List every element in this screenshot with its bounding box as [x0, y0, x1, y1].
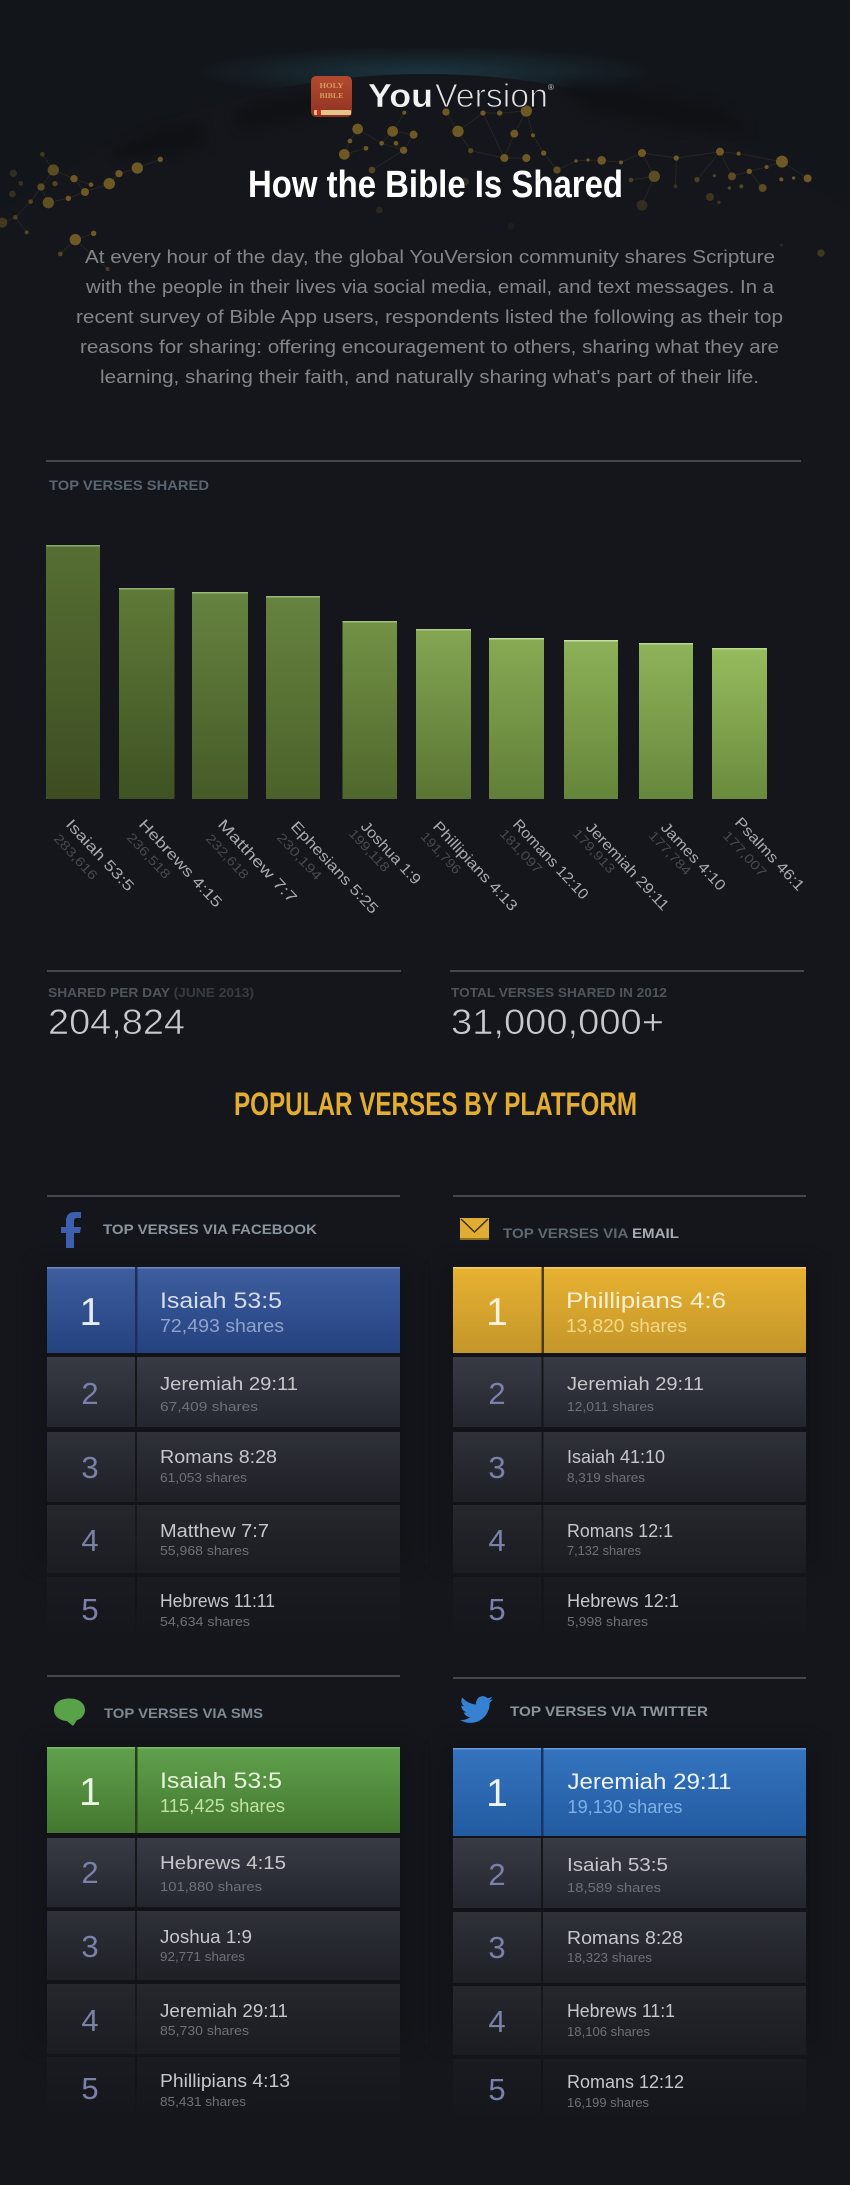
rank 1 row: 1 — [486, 1772, 508, 1815]
rank 5 row: Romans 12:12 — [567, 2072, 684, 2092]
icon: speech bubble — [54, 1698, 85, 1726]
icon: envelope — [460, 1218, 489, 1240]
rank 3 row: 18,323 shares — [567, 1950, 653, 1965]
icon: holy bible book: BIBLE — [320, 91, 344, 100]
rank 3 row: 61,053 shares — [160, 1470, 248, 1485]
rank 3 row — [47, 1911, 400, 1980]
rank 1 row: Phillipians 4:6 — [566, 1288, 726, 1313]
rank 3 row: Isaiah 41:10 — [567, 1447, 665, 1467]
rank 4 row: 18,106 shares — [567, 2024, 650, 2039]
bar labels: 283,616 — [51, 831, 101, 883]
rank 1 row: 13,820 shares — [566, 1316, 687, 1336]
rank 1 row: 1 — [79, 1771, 101, 1814]
bars — [46, 545, 767, 799]
rank 2 row: Hebrews 4:15 — [160, 1853, 286, 1873]
stat: total verses shared: TOTAL VERSES SHARED IN 2012 — [451, 985, 667, 1000]
rank 3 row: Romans 8:28 — [567, 1928, 683, 1948]
rank 2 row: 2 — [81, 1376, 99, 1411]
rank 5 row: Hebrews 11:11 — [160, 1591, 275, 1611]
rank 2 row — [453, 1357, 806, 1427]
bar labels: Ephesians 5:25 — [287, 818, 381, 917]
rank 5 row: 5 — [488, 1592, 506, 1627]
panel label: TOP VERSES VIA TWITTER — [510, 1703, 708, 1719]
rank 1 row: 19,130 shares — [568, 1797, 682, 1817]
bar labels: 230,194 — [274, 830, 325, 883]
rank 1 row: 1 — [80, 1291, 101, 1334]
rank 4 row: 4 — [488, 2004, 506, 2039]
wordmark — [368, 77, 554, 114]
rank 4 row: Matthew 7:7 — [160, 1521, 269, 1541]
rank 5 row — [47, 2057, 400, 2120]
intro text block: At every hour of the day, the global YouVersion community shares Scripture — [85, 247, 775, 267]
stat: shared per day: 204,824 — [48, 1003, 185, 1042]
rank 4 row: Romans 12:1 — [567, 1521, 673, 1541]
intro text block: recent survey of Bible App users, respondents listed the following as their top — [76, 307, 783, 327]
wordmark: Version — [435, 77, 548, 114]
rank 5 row: Hebrews 12:1 — [567, 1591, 679, 1611]
bar labels: Joshua 1:9 — [357, 818, 424, 888]
rank 4 row: 7,132 shares — [567, 1543, 641, 1558]
rank 4 row — [453, 1505, 806, 1573]
rank 2 row: 2 — [488, 1857, 506, 1892]
rank 1 row: 115,425 shares — [160, 1796, 285, 1816]
bar labels: 199,118 — [346, 826, 393, 875]
stat: shared per day: SHARED PER DAY (JUNE 2013) — [48, 985, 254, 1000]
icon: facebook f — [61, 1212, 81, 1248]
rank 2 row — [47, 1357, 400, 1427]
rank 2 row: 101,880 shares — [160, 1879, 263, 1894]
logo: YouVersion — [311, 76, 554, 117]
rank 4 row: Hebrews 11:1 — [567, 2001, 675, 2021]
rank 3 row: 3 — [488, 1450, 506, 1485]
rank 5 row: 5 — [81, 2071, 99, 2106]
rank 3 row — [453, 1432, 806, 1502]
bar labels — [51, 814, 808, 917]
intro text block: with the people in their lives via social media, email, and text messages. In a — [85, 277, 775, 297]
rank 3 row: 3 — [81, 1929, 99, 1964]
rank 5 row: 5 — [488, 2072, 506, 2107]
rank 5 row: 5,998 shares — [567, 1614, 649, 1629]
panel: facebook — [47, 1195, 400, 1640]
rank 3 row: 3 — [488, 1930, 506, 1965]
rank 1 row — [453, 1267, 806, 1353]
rank 4 row — [453, 1986, 806, 2055]
bar labels: Romans 12:10 — [509, 816, 592, 903]
rank 5 row — [453, 1577, 806, 1640]
rank 4 row — [47, 1505, 400, 1573]
rank 3 row: Joshua 1:9 — [160, 1927, 252, 1947]
rank 5 row — [47, 1577, 400, 1640]
stat: total verses shared: 31,000,000+ — [451, 1003, 664, 1042]
panel label: TOP VERSES VIA FACEBOOK — [103, 1221, 317, 1237]
panel label: TOP VERSES VIA SMS — [104, 1705, 263, 1721]
rank 4 row: 4 — [81, 2003, 99, 2038]
icon: twitter bird — [460, 1696, 493, 1723]
bar labels: Phillipians 4:13 — [429, 818, 521, 915]
bar labels: 181,097 — [497, 826, 545, 876]
rank 2 row: 18,589 shares — [567, 1880, 662, 1895]
bar labels: Hebrews 4:15 — [135, 816, 225, 911]
rank 2 row: 67,409 shares — [160, 1399, 259, 1414]
rank 1 row — [47, 1747, 400, 1833]
bar labels: Jeremiah 29:11 — [582, 819, 672, 914]
bar labels: Matthew 7:7 — [214, 816, 300, 907]
heading: top verses shared: TOP VERSES SHARED — [49, 477, 209, 493]
rank 1 row: Jeremiah 29:11 — [568, 1769, 732, 1794]
icon: holy bible book — [311, 76, 352, 117]
rank 4 row: 4 — [81, 1523, 99, 1558]
panel: twitter — [453, 1677, 806, 2122]
bar labels: 177,784 — [646, 828, 694, 878]
rank 3 row: Romans 8:28 — [160, 1447, 277, 1467]
rank 5 row: Phillipians 4:13 — [160, 2071, 290, 2091]
rank 1 row — [47, 1267, 400, 1353]
bar labels: 232,618 — [203, 831, 252, 882]
bar labels: 179,913 — [570, 826, 618, 876]
panel: sms — [47, 1675, 400, 2120]
rank 5 row: 85,431 shares — [160, 2094, 247, 2109]
wordmark: ® — [548, 83, 554, 92]
rank 2 row — [453, 1838, 806, 1908]
rank 1 row: 1 — [486, 1291, 508, 1334]
rank 3 row — [453, 1912, 806, 1983]
rank 2 row: 12,011 shares — [567, 1399, 655, 1414]
bar chart: top verses shared — [46, 545, 808, 917]
rank 1 row — [453, 1748, 806, 1836]
rank 1 row: Isaiah 53:5 — [160, 1768, 282, 1793]
intro text block — [76, 247, 783, 387]
panel: email — [453, 1195, 806, 1640]
rank 1 row: 72,493 shares — [160, 1316, 284, 1336]
stat: total verses shared — [450, 970, 804, 1042]
globe and network map backdrop — [0, 0, 850, 1166]
bar labels: 236,518 — [124, 830, 174, 882]
rank 4 row: 4 — [488, 1523, 506, 1558]
rank 5 row: 16,199 shares — [567, 2095, 649, 2110]
bar labels: 177,007 — [720, 828, 770, 880]
rank 2 row: Isaiah 53:5 — [567, 1855, 668, 1875]
bar labels: Isaiah 53:5 — [62, 816, 137, 895]
rank 2 row: 2 — [488, 1376, 506, 1411]
stat: shared per day — [47, 970, 401, 1042]
rank 4 row: Jeremiah 29:11 — [160, 2001, 288, 2021]
rank 4 row: 55,968 shares — [160, 1543, 250, 1558]
rank 3 row: 3 — [81, 1450, 99, 1485]
rank 3 row — [47, 1432, 400, 1502]
rank 2 row — [47, 1838, 400, 1907]
bar labels: James 4:10 — [657, 819, 729, 894]
rank 3 row: 8,319 shares — [567, 1470, 646, 1485]
rank 2 row: Jeremiah 29:11 — [160, 1374, 298, 1394]
rank 5 row: 5 — [81, 1592, 99, 1627]
rank 2 row: Jeremiah 29:11 — [567, 1374, 704, 1394]
icon: holy bible book: HOLY — [320, 81, 344, 90]
rank 4 row: 85,730 shares — [160, 2023, 250, 2038]
wordmark: You — [368, 77, 433, 114]
section heading: popular verses by platform: POPULAR VERSES BY PLATFORM — [234, 1086, 637, 1122]
rank 5 row — [453, 2059, 806, 2122]
rank 3 row: 92,771 shares — [160, 1949, 246, 1964]
rank 4 row — [47, 1984, 400, 2054]
bar labels: 191,796 — [418, 829, 464, 877]
intro text block: learning, sharing their faith, and naturally sharing what's part of their life. — [100, 367, 759, 387]
rank 1 row: Isaiah 53:5 — [160, 1288, 282, 1313]
rank 2 row: 2 — [81, 1855, 99, 1890]
intro text block: reasons for sharing: offering encouragement to others, sharing what they are — [80, 337, 779, 357]
bar labels: Psalms 46:1 — [731, 814, 808, 894]
title: How the Bible Is Shared — [248, 164, 623, 206]
rank 5 row: 54,634 shares — [160, 1614, 251, 1629]
panel label: TOP VERSES VIA EMAIL — [503, 1225, 679, 1241]
